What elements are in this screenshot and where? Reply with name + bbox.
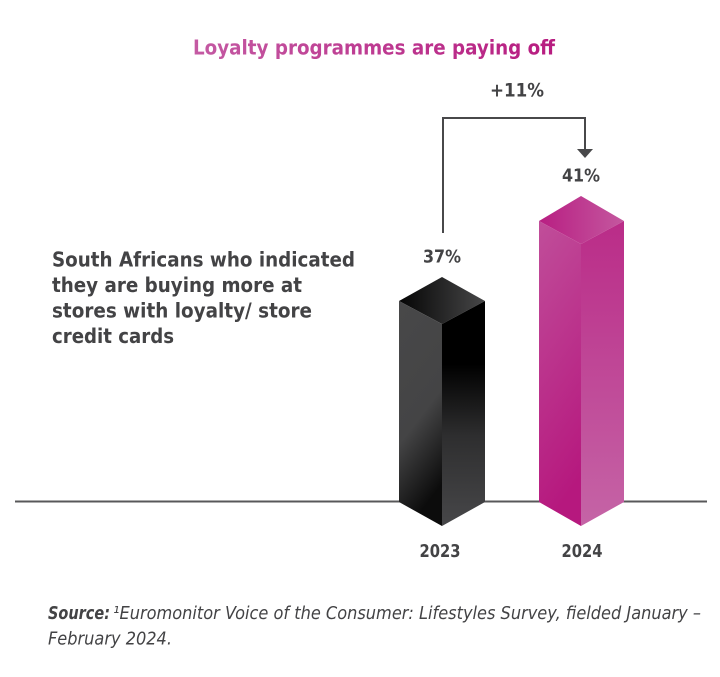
bar: 2024: [539, 196, 624, 526]
year label 2023: 2023: [420, 541, 460, 562]
source note: Source:: [48, 603, 110, 624]
arrow: growth connector: [443, 118, 593, 233]
year label 2024: 2024: [562, 541, 602, 562]
value label 2024: 41%: [562, 166, 600, 186]
value label 2023: 37%: [423, 246, 461, 268]
source note: [48, 603, 701, 650]
growth label: +11%: [490, 80, 544, 102]
source note: February 2024.: [48, 630, 172, 650]
description text block: stores with loyalty/ store: [52, 298, 312, 322]
description text block: they are buying more at: [52, 273, 302, 297]
bar: 2023: [399, 277, 485, 526]
description text block: credit cards: [52, 324, 174, 348]
description text block: South Africans who indicated: [52, 248, 355, 272]
baseline axis: [15, 500, 707, 502]
title: Loyalty programmes are paying off: [193, 36, 556, 60]
description text block: [52, 248, 355, 348]
